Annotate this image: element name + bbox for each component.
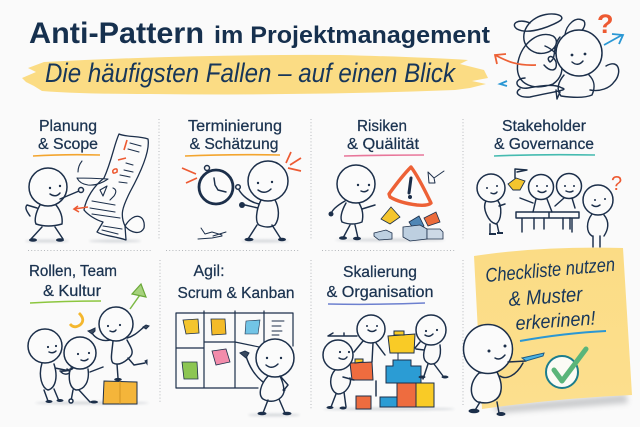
icon: yellow loop: [70, 313, 83, 327]
icon: green arrow: [130, 284, 146, 309]
panel: Risiken & Qualität: Risiken: [357, 118, 407, 135]
panel: Planung & Scope: [26, 118, 148, 242]
panel: Terminierung & Schätzung: Terminierung: [188, 118, 282, 135]
stacked coloured blocks: [350, 331, 434, 409]
figure: middle builder: [328, 315, 385, 396]
panel: Skalierung & Organisation: Skalierung: [343, 264, 417, 281]
subtitle banner: Die häufigsten Fallen – auf einen Blick: [45, 58, 456, 88]
icon: warning triangle: [389, 167, 444, 205]
title: im Projektmanagement: [214, 22, 490, 49]
panel: Stakeholder & Governance: Stakeholder: [502, 118, 586, 135]
panel: Stakeholder & Governance: [477, 118, 622, 247]
figure: planner: [26, 168, 83, 242]
figure: right builder: [415, 315, 448, 379]
icon: tangled figure: [495, 9, 623, 99]
callout: sticky note: [464, 248, 632, 416]
icon: scattered blocks: [374, 207, 443, 241]
figure: presenter: [240, 339, 294, 415]
panel: Risiken & Qualität: [328, 118, 444, 241]
panel: Agil: Scrum & Kanban: Scrum & Kanban: [178, 285, 294, 302]
figure: estimator: [236, 161, 288, 241]
title: [29, 17, 490, 50]
panel: Terminierung & Schätzung: [182, 118, 301, 241]
panel: Planung & Scope: Planung: [39, 118, 97, 135]
sticky note text: [485, 254, 616, 335]
icon: check mark: [546, 349, 586, 388]
sticky note text: & Muster: [508, 283, 584, 311]
figure: person with pen: [464, 324, 544, 416]
panel: Skalierung & Organisation: [323, 264, 448, 410]
panel: Agil: Scrum & Kanban: [176, 263, 294, 415]
figure: two teammates: [28, 329, 103, 404]
title: Anti-Pattern: [29, 17, 204, 50]
panel: Terminierung & Schätzung: & Schätzung: [190, 136, 278, 153]
panel: Rollen, Team & Kultur: & Kultur: [43, 283, 101, 300]
panel: Planung & Scope: & Scope: [38, 136, 98, 153]
figure: inspector: [328, 165, 375, 240]
icon: long scroll: [74, 134, 148, 240]
icon: yellow flag box: [508, 169, 527, 190]
panel: Agil: Scrum & Kanban: Agil:: [194, 263, 224, 280]
panel: Rollen, Team & Kultur: Rollen, Team: [29, 263, 117, 280]
sticky note text: erkerinen!: [515, 307, 597, 335]
icon: alarm clock: [182, 152, 301, 239]
panel: Rollen, Team & Kultur: [28, 263, 149, 404]
arrows and question mark: ?: [597, 9, 614, 39]
panel: Skalierung & Organisation: & Organisation: [326, 284, 434, 301]
figure: jumping teammate: [88, 307, 149, 381]
figure: left builder: [323, 340, 354, 410]
panel: Risiken & Qualität: & Quälität: [347, 136, 420, 153]
figure: stakeholder group: [477, 174, 613, 247]
panel: Stakeholder & Governance: & Governance: [494, 136, 594, 153]
sticky note text: Checkliste nutzen: [485, 254, 616, 287]
kanban board: [176, 311, 293, 388]
icon: question mark: ?: [611, 173, 622, 195]
icon: orange box: [103, 381, 137, 404]
